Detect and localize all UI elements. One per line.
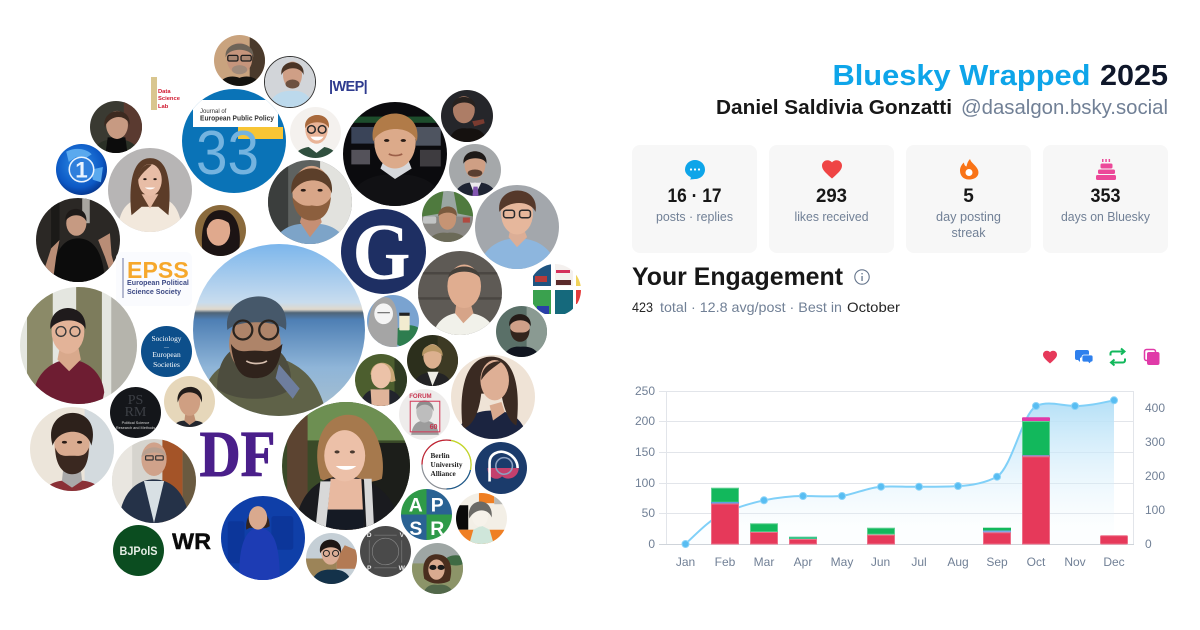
logo: DVPW: P: [366, 564, 371, 571]
left axis labels: [635, 384, 655, 551]
logo: BJPolS: [112, 524, 164, 576]
month labels: Apr: [794, 555, 812, 569]
avatar: man in blazer in library: [112, 439, 196, 523]
stat card: day posting streak: 5: [963, 186, 974, 207]
logo: European Political Science Society: EPSS: [127, 257, 189, 283]
month labels: Dec: [1103, 555, 1125, 569]
bar: Sep: [983, 528, 1011, 544]
cumulative line points: [682, 397, 1118, 548]
logo: APSR: S: [409, 517, 422, 539]
logo: Sociology - European Societies: [140, 326, 192, 376]
profile name and handle: Daniel Saldivia Gonzatti: [716, 97, 952, 119]
logo: Data Science Lab: Data: [158, 89, 171, 95]
logo: Journal of European Public Policy: European Public Policy: [200, 116, 274, 122]
left axis labels: 200: [635, 414, 655, 428]
avatar: bearded man with glasses: [496, 306, 547, 357]
logo: blue circle with pink crescent: [475, 442, 527, 494]
engagement summary: total · 12.8 avg/post · Best in: [660, 299, 842, 315]
avatar: young man in dark turtleneck: [90, 101, 142, 153]
logo: Tagesschau globe: 1: [75, 157, 87, 182]
logo: Data Science Lab: [151, 77, 180, 110]
right axis labels: 300: [1145, 435, 1165, 449]
left axis labels: 0: [648, 537, 655, 551]
heading: Your Engagement: Your Engagement: [632, 263, 844, 291]
logo: Sociology - European Societies: —: [162, 346, 170, 350]
avatar: main profile, man in beanie by a lake: [193, 244, 365, 416]
stat card: day posting streak: streak: [952, 225, 986, 240]
logo: European Political Science Society: Science Society: [127, 288, 181, 296]
bar: Apr: [789, 537, 817, 544]
logo: European Political Science Society: [116, 252, 192, 306]
avatar: young man with glasses, canyon behind: [306, 533, 357, 584]
avatar: man in maroon shirt: [20, 287, 137, 404]
logo: Data Science Lab: Science: [158, 96, 180, 102]
avatar: older man with glasses: [214, 35, 265, 86]
logo: Political Science Research and Methods: Political Science: [121, 420, 149, 424]
profile name and handle: [716, 97, 1168, 119]
stat card: day posting streak: [906, 145, 1031, 253]
avatar: bald man in white shirt: [418, 251, 502, 335]
title: 2025: [1100, 60, 1168, 92]
month labels: Mar: [754, 555, 774, 569]
engagement summary: [632, 299, 900, 315]
avatar: smiling man with glasses: [290, 107, 341, 158]
right axis labels: 100: [1145, 503, 1165, 517]
logo: DVPW: V: [399, 532, 404, 539]
image: Forum magazine cover portrait: [399, 389, 450, 440]
month labels: Feb: [715, 555, 736, 569]
avatar cluster: [20, 35, 581, 594]
avatar: man in light blue shirt: [264, 56, 316, 108]
chart legend icons: [1043, 348, 1160, 366]
cumulative line: [686, 400, 1114, 544]
image: Forum magazine cover portrait: FORUM: [409, 393, 431, 400]
legend: likes heart: [1043, 351, 1057, 364]
icon: birthday cake: [1096, 159, 1116, 180]
month labels: [676, 555, 1125, 569]
month labels: Jun: [871, 555, 890, 569]
chart gridlines: [659, 391, 1134, 544]
icon: flame: [960, 159, 978, 180]
avatar: woman smiling, black cardigan: [282, 402, 410, 530]
month labels: May: [831, 555, 853, 569]
right axis labels: 400: [1145, 401, 1165, 415]
avatar: man with dark hair on beige: [164, 376, 215, 427]
area under cumulative line: [686, 400, 1114, 544]
logo: Data Science Lab: Lab: [158, 104, 168, 110]
month labels: Jul: [911, 555, 927, 569]
right axis labels: [1145, 401, 1165, 551]
logo: APSR: R: [430, 517, 444, 539]
logo: Berlin University Alliance: Berlin: [430, 452, 449, 460]
logo: APSR: P: [430, 494, 443, 516]
logo: APSR: [401, 489, 452, 540]
logo: Journal of European Public Policy: Journal of: [200, 109, 227, 115]
left axis labels: 50: [642, 506, 655, 520]
avatar: man on tree-lined street: [422, 191, 473, 242]
profile name and handle: @dasalgon.bsky.social: [961, 97, 1168, 119]
left axis labels: 250: [635, 384, 655, 398]
stat card: days on Bluesky: days on Bluesky: [1061, 209, 1150, 224]
avatar: man in suit with purple tie: [449, 144, 501, 196]
right axis labels: 0: [1145, 537, 1152, 551]
avatar: woman in blue fleece against blue door: [221, 496, 305, 580]
avatar: cartoon in gray hoodie with coffee: [367, 295, 419, 347]
logo: European Political Science Society: European Political: [127, 279, 189, 287]
stat card: posts and replies: posts · replies: [656, 209, 733, 224]
logo: DVPW: D: [366, 532, 371, 539]
logo: Political Science Research and Methods: PS: [127, 392, 143, 408]
logo: Tagesschau globe: [56, 144, 107, 195]
month labels: Jan: [676, 555, 695, 569]
logo: BJPolS: BJPolS: [119, 544, 157, 558]
logo: Berlin University Alliance: Alliance: [430, 470, 455, 478]
stat card: days on Bluesky: [1043, 145, 1168, 253]
left axis labels: 150: [635, 445, 655, 459]
avatar: illustrated portrait on orange and black: [456, 493, 507, 544]
month labels: Oct: [1027, 555, 1046, 569]
image: book covers: [533, 264, 581, 314]
legend: replies chat: [1075, 350, 1093, 364]
engagement summary: 423: [632, 299, 653, 315]
legend: quotes pages: [1144, 350, 1160, 365]
stat card: day posting streak: day posting: [936, 209, 1001, 224]
logo: Sociology - European Societies: Societies: [153, 360, 179, 368]
title: Bluesky Wrapped: [832, 60, 1090, 92]
avatar: woman with dark hair: [195, 205, 246, 256]
bar: Jun: [868, 528, 894, 544]
stat card: days on Bluesky: 353: [1090, 186, 1120, 207]
logo: Sociology - European Societies: Sociology: [151, 334, 181, 342]
logo: Political Science Research and Methods: Research and Methods: [115, 426, 155, 430]
bar: Oct: [1022, 417, 1050, 544]
avatar: man with curly hair and beard: [30, 407, 114, 491]
logo: Journal of European Public Policy: [182, 89, 286, 193]
engagement chart: [635, 384, 1165, 569]
logo: Journal of European Public Policy: 33: [196, 119, 259, 188]
bar: Feb: [711, 488, 739, 544]
logo: Political Science Research and Methods: RM: [124, 404, 146, 420]
logo: WEP: |WEP|: [329, 79, 367, 95]
icon: info: [855, 270, 869, 284]
avatar: man with glasses and light blue shirt: [475, 185, 559, 269]
logo: Berlin University Alliance: University: [430, 460, 462, 468]
avatar: woman with sunglasses outdoors: [412, 543, 463, 594]
logo: Sociology - European Societies: European: [152, 350, 180, 358]
month labels: Sep: [986, 555, 1008, 569]
logo: Political Science Research and Methods: [110, 386, 160, 438]
engagement summary: October: [847, 299, 900, 315]
stat card: likes received: likes received: [794, 209, 868, 224]
avatar: blonde woman smiling: [355, 354, 407, 406]
stat card: posts and replies: [632, 145, 757, 253]
image: Forum magazine cover portrait: 60: [429, 422, 437, 430]
avatar: young man in dark suit: [407, 335, 458, 386]
logo: DVPW: [360, 526, 410, 576]
month labels: Nov: [1064, 555, 1086, 569]
stacked bars: [711, 417, 1128, 544]
avatar: bearded man in blue shirt: [268, 160, 352, 244]
icon: heart: [822, 160, 842, 178]
bar: Mar: [750, 524, 778, 544]
stat card: likes received: 293: [816, 186, 847, 207]
avatar: woman with long brown hair: [108, 148, 192, 232]
stat card: likes received: [769, 145, 894, 253]
avatar: woman with long dark hair: [451, 355, 535, 439]
month labels: Aug: [947, 555, 969, 569]
right axis labels: 200: [1145, 469, 1165, 483]
logo: Berlin University Alliance: [420, 438, 472, 490]
logo: APSR: A: [408, 494, 422, 516]
stat card: posts and replies: 16 · 17: [668, 186, 722, 207]
left axis labels: 100: [635, 476, 655, 490]
bar: Dec: [1100, 536, 1128, 544]
avatar: man in dark shirt on dark background: [441, 90, 493, 142]
avatar: man with orange hair in black sweater: [343, 102, 447, 206]
icon: chat bubble: [685, 160, 705, 180]
logo: DVPW: W: [398, 564, 405, 571]
legend: reposts arrows: [1110, 348, 1125, 366]
avatar: man in black gesturing: [36, 198, 120, 282]
